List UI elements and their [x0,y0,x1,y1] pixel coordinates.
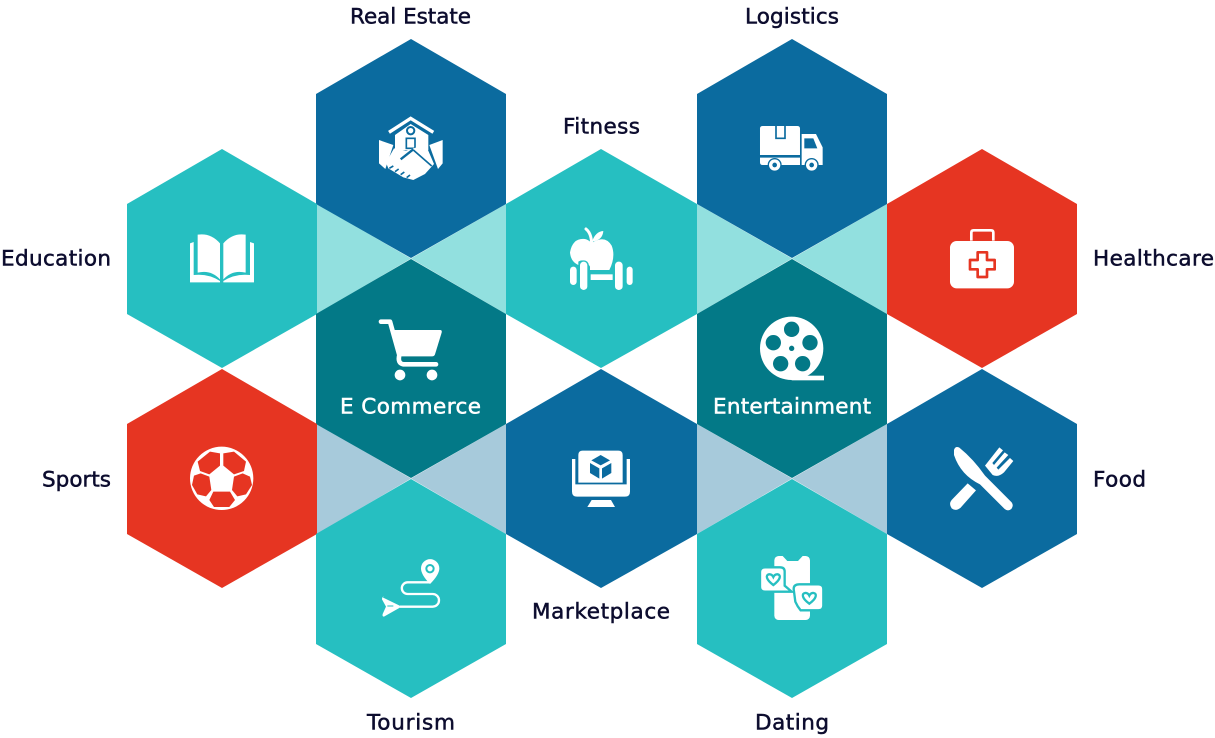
panel: healthcare [887,149,1214,368]
connector: light teal bowtie right [697,204,887,314]
panel: sports [42,369,317,588]
label: marketplace: Marketplace [532,600,670,624]
panel: dating [697,479,887,736]
icon: phone with heart messages [760,556,823,620]
connector: light teal bowtie left [317,204,506,314]
panel: real estate [316,4,506,258]
hexagon: food [887,369,1077,588]
label: tourism: Tourism [366,710,455,736]
label: entertainment: Entertainment [713,394,871,420]
panel: food [887,369,1146,588]
hexagon: dating [697,479,887,698]
panel: entertainment [697,259,887,478]
hexagon: e commerce [316,259,506,478]
panel: e commerce [316,259,506,478]
panel: education [1,149,317,368]
icon: open book [190,234,254,282]
panel: fitness [506,114,697,368]
label: real estate: Real Estate [350,4,471,30]
connector: light blue bowtie right [697,424,887,534]
connector: light blue bowtie left [317,424,506,534]
label: healthcare: Healthcare [1093,246,1214,272]
hexagon: sports [127,369,317,588]
label: e commerce: E Commerce [340,394,481,420]
label: sports: Sports [42,468,111,492]
icon: house and handshake [379,118,443,180]
panel: marketplace [506,369,697,624]
icon: knife and fork [950,447,1013,510]
icon: film reel [760,317,824,380]
icon: delivery truck [760,126,823,171]
hexagon: healthcare [887,149,1077,368]
icon: apple and dumbbell [570,229,633,291]
label: fitness: Fitness [563,114,640,140]
hexagon: real estate [316,39,506,258]
label: logistics: Logistics [745,4,839,30]
icon: soccer ball [190,447,253,510]
icon: computer with box [572,451,630,507]
hexagon: fitness [506,149,697,368]
hexagon: entertainment [697,259,887,478]
icon: shopping cart [381,322,442,380]
label: education: Education [1,246,111,272]
hexagon: tourism [316,479,506,698]
icon: first aid kit [950,230,1014,288]
label: dating: Dating [755,710,829,736]
icon: route with pin [382,559,439,617]
hexagon: marketplace [506,369,697,588]
hexagon: logistics [697,39,887,258]
label: food: Food [1093,468,1146,492]
panel: logistics [697,4,887,258]
hexagon: education [127,149,317,368]
panel: tourism [316,479,506,736]
